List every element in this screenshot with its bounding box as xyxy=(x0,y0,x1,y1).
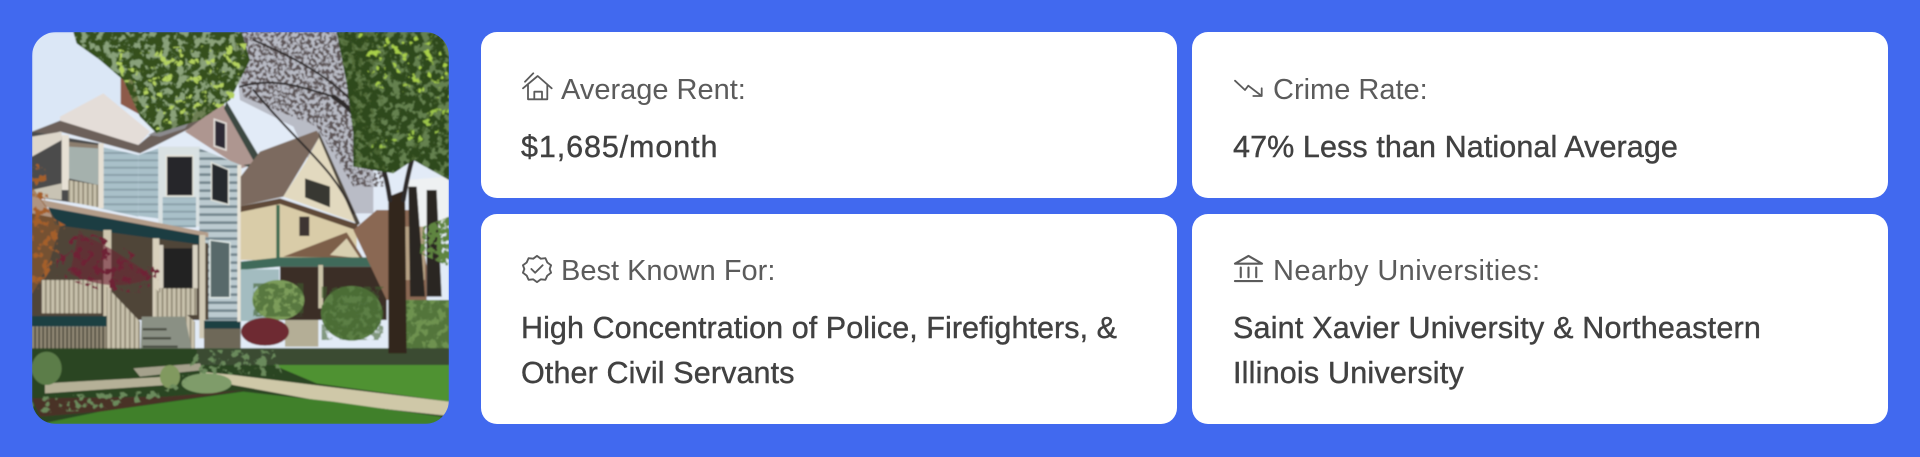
hedge and bushes xyxy=(403,300,449,357)
icon: university building xyxy=(1234,254,1264,282)
value: average rent: $1,685/month xyxy=(521,130,718,164)
label: best known for: Best Known For: xyxy=(561,255,775,287)
lower porch xyxy=(32,213,208,320)
photo: Victorian houses on a tree-lined street xyxy=(32,32,449,424)
card: best known for xyxy=(481,214,1177,424)
siding xyxy=(100,147,138,217)
value: nearby universities: Illinois University xyxy=(1233,356,1464,390)
icon: verified badge xyxy=(522,254,552,284)
label: nearby universities: Nearby Universities: xyxy=(1273,255,1540,287)
value: best known for: Other Civil Servants xyxy=(521,356,795,390)
card: average rent xyxy=(481,32,1177,198)
lawn and garden xyxy=(32,348,449,424)
card: nearby universities xyxy=(1192,214,1888,424)
main house gable xyxy=(185,103,257,168)
icon: house xyxy=(522,72,553,100)
value: nearby universities: Saint Xavier University & Northeastern xyxy=(1233,311,1761,345)
value: best known for: High Concentration of Police, Firefighters, & xyxy=(521,311,1117,345)
label: average rent: Average Rent: xyxy=(561,74,746,106)
value: nearby universities xyxy=(1233,311,1761,390)
icon: trending down arrow xyxy=(1234,80,1263,97)
second house xyxy=(241,131,320,206)
back trunks xyxy=(408,187,442,297)
label: crime rate: Crime Rate: xyxy=(1273,74,1428,106)
third house xyxy=(353,210,427,300)
white roof xyxy=(60,93,150,145)
sky xyxy=(32,32,449,424)
red tree and orange shrub xyxy=(70,233,153,285)
foliage xyxy=(73,32,250,133)
trunk xyxy=(388,190,407,353)
upper porch xyxy=(32,132,100,207)
chimney xyxy=(121,77,140,114)
card: crime rate xyxy=(1192,32,1888,198)
value: best known for xyxy=(521,311,1117,390)
value: crime rate: 47% Less than National Average xyxy=(1233,130,1678,164)
